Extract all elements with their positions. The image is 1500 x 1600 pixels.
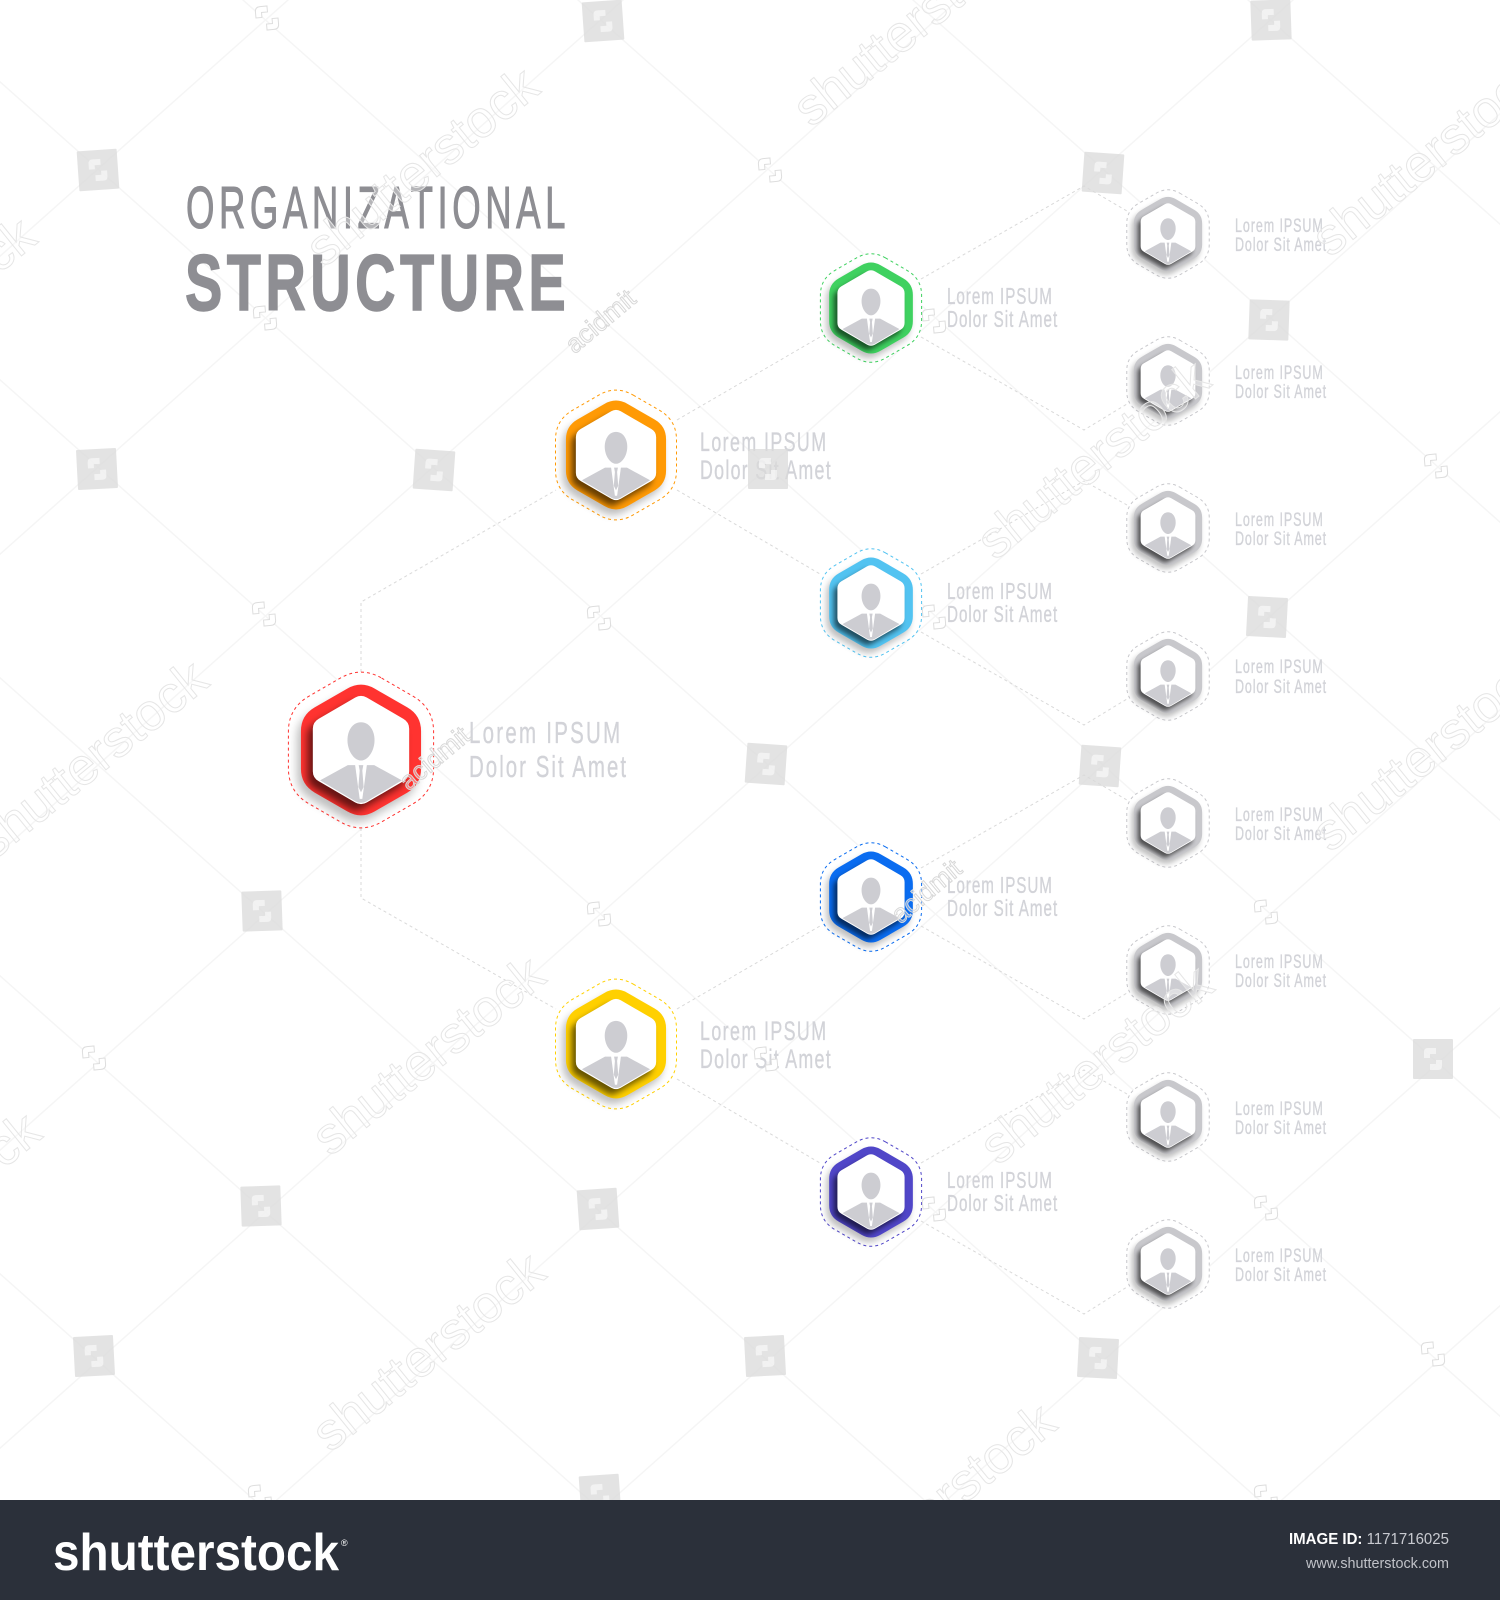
node: grey 4 (1127, 632, 1326, 720)
icon: grey avatar hexagon 5 (1127, 779, 1209, 867)
dashed connectors (361, 186, 1127, 1314)
watermark overlay: shutterstock (301, 1240, 556, 1463)
label: yellow node: Lorem IPSUM (700, 1015, 826, 1046)
label: grey 2: Dolor Sit Amet (1235, 381, 1326, 403)
label: green node: Lorem IPSUM (947, 284, 1052, 310)
node: purple (820, 1138, 1058, 1246)
label: red node: Dolor Sit Amet (469, 749, 627, 784)
label: yellow node: Dolor Sit Amet (700, 1043, 831, 1074)
node: grey 2 (1127, 337, 1326, 425)
node: light blue (820, 549, 1058, 657)
label: grey 6: Lorem IPSUM (1235, 951, 1323, 973)
node: grey 5 (1127, 779, 1326, 867)
node: grey 8 (1127, 1220, 1326, 1308)
label: grey 7 (1235, 1098, 1326, 1139)
label: grey 3: Dolor Sit Amet (1235, 528, 1326, 550)
watermark overlay: shutterstock (295, 55, 550, 278)
icon: red avatar hexagon (288, 672, 434, 828)
footer image id: IMAGE ID: 1171716025 (1289, 1531, 1449, 1548)
label: grey 1: Dolor Sit Amet (1235, 234, 1326, 256)
watermark overlay: acidmit (885, 853, 968, 929)
label: grey 4: Dolor Sit Amet (1235, 676, 1326, 698)
label: grey 1: Lorem IPSUM (1235, 215, 1323, 237)
label: grey 8: Dolor Sit Amet (1235, 1264, 1326, 1286)
node: grey 6 (1127, 926, 1326, 1014)
watermark overlay: shutterstock (966, 348, 1221, 571)
label: orange node (700, 426, 831, 485)
icon: grey avatar hexagon 3 (1127, 484, 1209, 572)
footer url: www.shutterstock.com (1305, 1556, 1449, 1572)
label: red node (469, 715, 627, 784)
label: light blue node: Lorem IPSUM (947, 579, 1052, 605)
label: blue node: Lorem IPSUM (947, 873, 1052, 899)
node: grey 3 (1127, 484, 1326, 572)
label: grey 3: Lorem IPSUM (1235, 509, 1323, 531)
icon: grey avatar hexagon 8 (1127, 1220, 1209, 1308)
label: grey 8 (1235, 1245, 1326, 1286)
icon: grey avatar hexagon 4 (1127, 632, 1209, 720)
icon: purple avatar hexagon (820, 1138, 922, 1246)
label: yellow node (700, 1015, 831, 1074)
label: blue node (947, 873, 1058, 922)
label: grey 4: Lorem IPSUM (1235, 656, 1323, 678)
icon: grey avatar hexagon 1 (1127, 190, 1209, 278)
node: grey 1 (1127, 190, 1326, 278)
watermark overlay: shutterstock (969, 953, 1224, 1176)
icon: light blue avatar hexagon (820, 549, 922, 657)
label: light blue node: Dolor Sit Amet (947, 602, 1058, 628)
icon: blue avatar hexagon (820, 843, 922, 951)
title line: organizational: ORGANIZATIONAL (186, 176, 565, 241)
label: green node (947, 284, 1058, 333)
label: green node: Dolor Sit Amet (947, 307, 1058, 333)
icon: yellow avatar hexagon (556, 979, 676, 1109)
node: blue (820, 843, 1058, 951)
node: top level red (288, 672, 627, 828)
icon: grey avatar hexagon 7 (1127, 1073, 1209, 1161)
icon: green avatar hexagon (820, 254, 922, 362)
label: grey 2 (1235, 362, 1326, 403)
icon: grey avatar hexagon 6 (1127, 926, 1209, 1014)
label: grey 5: Dolor Sit Amet (1235, 823, 1326, 845)
label: grey 4 (1235, 656, 1326, 698)
label: red node: Lorem IPSUM (469, 715, 620, 750)
label: purple node (947, 1168, 1058, 1217)
watermark overlay: acidmit (559, 283, 642, 359)
footer logo: shutterstock (53, 1524, 339, 1582)
label: grey 5 (1235, 804, 1326, 845)
label: orange node: Lorem IPSUM (700, 426, 826, 457)
label: grey 8: Lorem IPSUM (1235, 1245, 1323, 1267)
label: purple node: Lorem IPSUM (947, 1168, 1052, 1194)
label: grey 1 (1235, 215, 1326, 256)
label: blue node: Dolor Sit Amet (947, 896, 1058, 922)
label: purple node: Dolor Sit Amet (947, 1191, 1058, 1217)
label: light blue node (947, 579, 1058, 628)
node: orange (556, 390, 831, 520)
node: yellow (556, 979, 831, 1109)
footer registered mark: ® (341, 1538, 348, 1548)
label: grey 6 (1235, 951, 1326, 992)
label: grey 7: Dolor Sit Amet (1235, 1117, 1326, 1139)
watermark overlay: acidmit (393, 720, 476, 796)
node: green (820, 254, 1058, 362)
label: grey 3 (1235, 509, 1326, 550)
title (185, 176, 566, 327)
node: grey 7 (1127, 1073, 1326, 1161)
title line: structure: STRUCTURE (185, 237, 566, 327)
watermark overlay: shutterstock (301, 944, 556, 1167)
icon: grey avatar hexagon 2 (1127, 337, 1209, 425)
footer bar (0, 1500, 1500, 1600)
icon: orange avatar hexagon (556, 390, 676, 520)
label: grey 5: Lorem IPSUM (1235, 804, 1323, 826)
label: grey 6: Dolor Sit Amet (1235, 970, 1326, 992)
label: grey 2: Lorem IPSUM (1235, 362, 1323, 384)
label: orange node: Dolor Sit Amet (700, 454, 831, 485)
label: grey 7: Lorem IPSUM (1235, 1098, 1323, 1120)
